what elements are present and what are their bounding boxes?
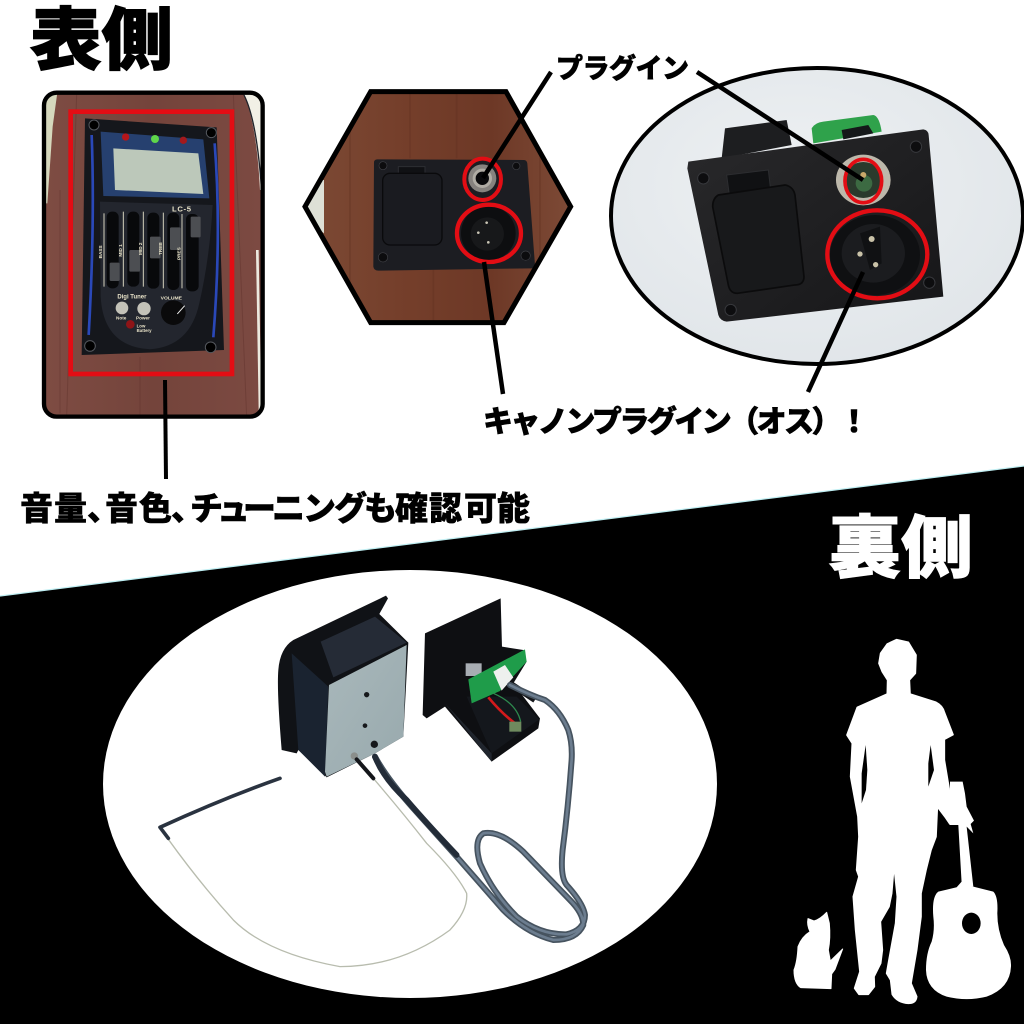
heading: back side: 裏側 bbox=[829, 511, 973, 587]
slider labels: MID 1 bbox=[118, 244, 123, 257]
cable highlight bbox=[457, 685, 585, 940]
leader lines: XLR label bbox=[484, 262, 863, 394]
slider labels: BASS bbox=[98, 245, 103, 258]
oval background bbox=[611, 68, 1023, 364]
volume knob bbox=[161, 295, 186, 325]
sliders bbox=[104, 212, 201, 291]
gray output cable bbox=[160, 685, 585, 967]
panel: hexagon output jack photo bbox=[305, 90, 571, 323]
tuner LEDs bbox=[122, 133, 129, 141]
rounded frame bbox=[44, 93, 263, 417]
LCD tuner display bbox=[101, 132, 209, 198]
red highlight rectangle bbox=[71, 112, 232, 374]
wood background bbox=[305, 90, 571, 323]
caption: volume tone tuning: 音量、音色、チューニングも確認可能 bbox=[20, 490, 530, 527]
rear box bbox=[722, 120, 792, 158]
jack barrel bbox=[466, 663, 482, 676]
plate screws bbox=[698, 141, 935, 316]
label: plug-in: プラグイン bbox=[556, 53, 689, 84]
white oval bbox=[103, 570, 717, 998]
red circle: XLR bbox=[827, 210, 927, 298]
jack plate bbox=[373, 159, 535, 271]
battery cover bbox=[383, 167, 442, 245]
slider labels: TREB bbox=[158, 242, 163, 255]
battery cover bbox=[713, 170, 804, 293]
leader line: panel to caption bbox=[165, 380, 166, 479]
jack connector bbox=[468, 164, 496, 192]
tuner buttons and labels: Note bbox=[116, 315, 127, 320]
silhouette: musician with cat and guitar bbox=[794, 640, 1011, 1003]
metal back plate bbox=[325, 645, 407, 777]
heading: front side: 表側 bbox=[30, 3, 173, 79]
wood background bbox=[44, 93, 263, 417]
tuner buttons and labels: Digi Tuner bbox=[117, 294, 147, 300]
white connector bbox=[493, 665, 513, 691]
box top face bbox=[321, 617, 407, 677]
arm gap left bbox=[862, 745, 867, 803]
black diagonal lower section bbox=[0, 466, 1024, 1024]
arm gap right bbox=[928, 745, 934, 787]
panel: oval connector close-up photo bbox=[611, 68, 1023, 364]
panel: back side oval photo bbox=[103, 570, 717, 998]
dark cable section bbox=[375, 757, 457, 855]
piezo sensor thin wire bbox=[168, 778, 467, 967]
red circle: XLR bbox=[457, 205, 521, 262]
blue side strips bbox=[89, 135, 93, 335]
guitar bbox=[926, 782, 1011, 999]
cable body bbox=[375, 685, 585, 940]
hexagon frame bbox=[305, 92, 571, 323]
back plate holes bbox=[363, 692, 378, 748]
red wire bbox=[488, 697, 515, 723]
XLR connector bbox=[830, 215, 920, 295]
slider labels bbox=[98, 242, 182, 260]
label: XLR plug-in male: キャノンプラグイン（オス）！ bbox=[483, 405, 869, 439]
preamp body silhouette bbox=[278, 596, 408, 777]
person bbox=[847, 640, 956, 1003]
green circuit board bbox=[468, 649, 527, 703]
box side bbox=[292, 653, 328, 777]
plate screws bbox=[378, 162, 530, 262]
right lower box side bbox=[445, 703, 492, 762]
jack output stud bbox=[351, 752, 358, 760]
green circuit board bbox=[812, 115, 882, 143]
piezo wire dark start bbox=[357, 759, 373, 778]
screws bbox=[85, 120, 216, 353]
tuner buttons and labels bbox=[116, 294, 152, 333]
tuner buttons and labels: Power bbox=[136, 316, 150, 321]
black preamp plate bbox=[82, 118, 224, 355]
slider labels: MID 2 bbox=[138, 242, 143, 255]
red circle: jack bbox=[464, 159, 501, 200]
panel: front control panel photo bbox=[44, 93, 263, 417]
cable sheath at connector bbox=[510, 683, 535, 700]
model label: LC-5 bbox=[172, 204, 192, 213]
slider section bbox=[100, 202, 213, 349]
cat bbox=[794, 912, 843, 989]
XLR connector bbox=[461, 206, 516, 261]
solder pad bbox=[509, 722, 521, 732]
right assembly silhouette bbox=[423, 598, 540, 762]
black plate bbox=[687, 129, 943, 322]
volume knob: VOLUME bbox=[161, 295, 183, 301]
red circle: jack bbox=[845, 159, 882, 203]
piezo sensor bar bbox=[160, 778, 280, 838]
slider labels: PRES bbox=[177, 247, 182, 260]
jack connector bbox=[836, 155, 891, 205]
green wire bbox=[493, 693, 521, 722]
leader lines: plug-in label bbox=[483, 72, 863, 180]
tuner buttons and labels: Battery bbox=[137, 328, 152, 333]
tuner buttons and labels: Low bbox=[137, 323, 146, 328]
guitar sound hole bbox=[962, 913, 981, 934]
